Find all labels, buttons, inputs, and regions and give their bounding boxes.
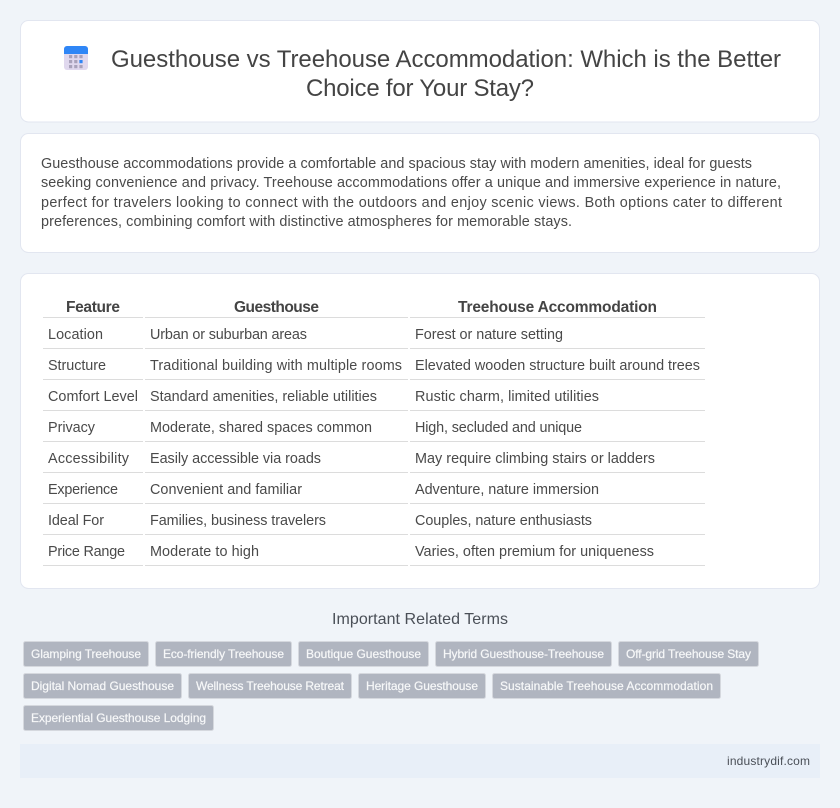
- chip: Off-grid Treehouse Stay: Off-grid Treehouse Stay: [626, 647, 751, 661]
- table row: Privacy: Privacy: [48, 420, 96, 436]
- table row: Price Range: Varies, often premium for uniqueness: [415, 544, 654, 560]
- table row: Privacy: Moderate, shared spaces common: [150, 420, 372, 436]
- table row: Comfort Level: Standard amenities, reliable utilities: [150, 389, 377, 405]
- table header: Feature: [66, 299, 120, 316]
- table row: Structure: Traditional building with multiple rooms: [150, 358, 402, 374]
- chip: Sustainable Treehouse Accommodation: [492, 674, 720, 698]
- table row: Comfort Level: Comfort Level: [48, 389, 138, 405]
- chip: Boutique Guesthouse: Boutique Guesthouse: [306, 647, 421, 661]
- table row: Privacy: High, secluded and unique: [415, 420, 582, 436]
- table row: Structure: Structure: [48, 358, 106, 374]
- table header: Guesthouse: [234, 299, 319, 316]
- text block: introduction: preferences, combining comfort with distinctive atmospheres for memorable stays.: [41, 214, 572, 230]
- title: [111, 46, 781, 102]
- table row: Location: Location: [48, 327, 103, 343]
- table row: Experience: Convenient and familiar: [150, 482, 302, 498]
- chip: Glamping Treehouse: Glamping Treehouse: [31, 647, 141, 661]
- chip: Eco-friendly Treehouse: [156, 642, 292, 666]
- table row: Accessibility: Accessibility: [48, 451, 130, 467]
- footer bar: [20, 744, 820, 778]
- table header: [66, 299, 657, 316]
- text block: introduction: [41, 156, 782, 230]
- panel: header: [20, 20, 820, 122]
- table row: Price Range: [48, 544, 654, 560]
- text block: introduction: perfect for travelers looking to connect with the outdoors and enjoy scenic views. Both options cater to different: [41, 195, 782, 211]
- table row: Experience: Experience: [48, 482, 118, 498]
- chip: Off-grid Treehouse Stay: [618, 642, 758, 666]
- table row: Ideal For: Couples, nature enthusiasts: [415, 513, 592, 529]
- chip: Digital Nomad Guesthouse: [24, 674, 182, 698]
- panel: comparison table: [20, 274, 820, 588]
- footer source: industrydif.com: [727, 754, 810, 768]
- chip: Glamping Treehouse: [24, 642, 148, 666]
- chip: Wellness Treehouse Retreat: [188, 674, 352, 698]
- chip: Experiential Guesthouse Lodging: Experiential Guesthouse Lodging: [31, 711, 206, 725]
- title: Guesthouse vs Treehouse Accommodation: Which is the Better: [111, 46, 781, 73]
- text block: introduction: seeking convenience and privacy. Treehouse accommodations offer a unique and immersive experience in nature,: [41, 175, 781, 191]
- table row: Comfort Level: [48, 389, 599, 405]
- chip: Hybrid Guesthouse-Treehouse: [436, 642, 612, 666]
- title: Choice for Your Stay?: [306, 75, 534, 102]
- table row: Location: Urban or suburban areas: [150, 327, 307, 343]
- table row: Accessibility: May require climbing stairs or ladders: [415, 451, 655, 467]
- table row: Location: Forest or nature setting: [415, 327, 563, 343]
- text block: introduction: Guesthouse accommodations provide a comfortable and spacious stay with modern amenities, ideal for guests: [41, 156, 752, 172]
- table row: Accessibility: Easily accessible via roads: [150, 451, 321, 467]
- table row: Experience: [48, 482, 599, 498]
- chip: Heritage Guesthouse: Heritage Guesthouse: [366, 679, 478, 693]
- table row: Comfort Level: Rustic charm, limited utilities: [415, 389, 599, 405]
- chip: Eco-friendly Treehouse: Eco-friendly Treehouse: [163, 647, 284, 661]
- table row: Ideal For: Ideal For: [48, 513, 104, 529]
- chip: Boutique Guesthouse: [298, 642, 428, 666]
- chip: Hybrid Guesthouse-Treehouse: Hybrid Guesthouse-Treehouse: [443, 647, 604, 661]
- panel: introduction: [20, 134, 820, 252]
- table row: Accessibility: [48, 451, 655, 467]
- table row: Ideal For: [48, 513, 592, 529]
- chip: Sustainable Treehouse Accommodation: Sustainable Treehouse Accommodation: [500, 679, 713, 693]
- chip: Heritage Guesthouse: [358, 674, 486, 698]
- heading: related terms: Important Related Terms: [332, 611, 508, 628]
- table row: Ideal For: Families, business travelers: [150, 513, 326, 529]
- table row: Price Range: Price Range: [48, 544, 125, 560]
- table header: Treehouse Accommodation: [458, 299, 657, 316]
- table row: Location: [48, 327, 563, 343]
- chip: Digital Nomad Guesthouse: Digital Nomad Guesthouse: [31, 679, 174, 693]
- table row: Structure: Elevated wooden structure built around trees: [415, 358, 700, 374]
- table row: Experience: Adventure, nature immersion: [415, 482, 599, 498]
- chip: Experiential Guesthouse Lodging: [24, 706, 214, 730]
- chip: Wellness Treehouse Retreat: Wellness Treehouse Retreat: [196, 679, 345, 693]
- table row: Structure: [48, 358, 700, 374]
- table row: Privacy: [48, 420, 582, 436]
- table row: Price Range: Moderate to high: [150, 544, 259, 560]
- icon: calendar: [64, 46, 88, 70]
- related terms chips: [24, 642, 758, 730]
